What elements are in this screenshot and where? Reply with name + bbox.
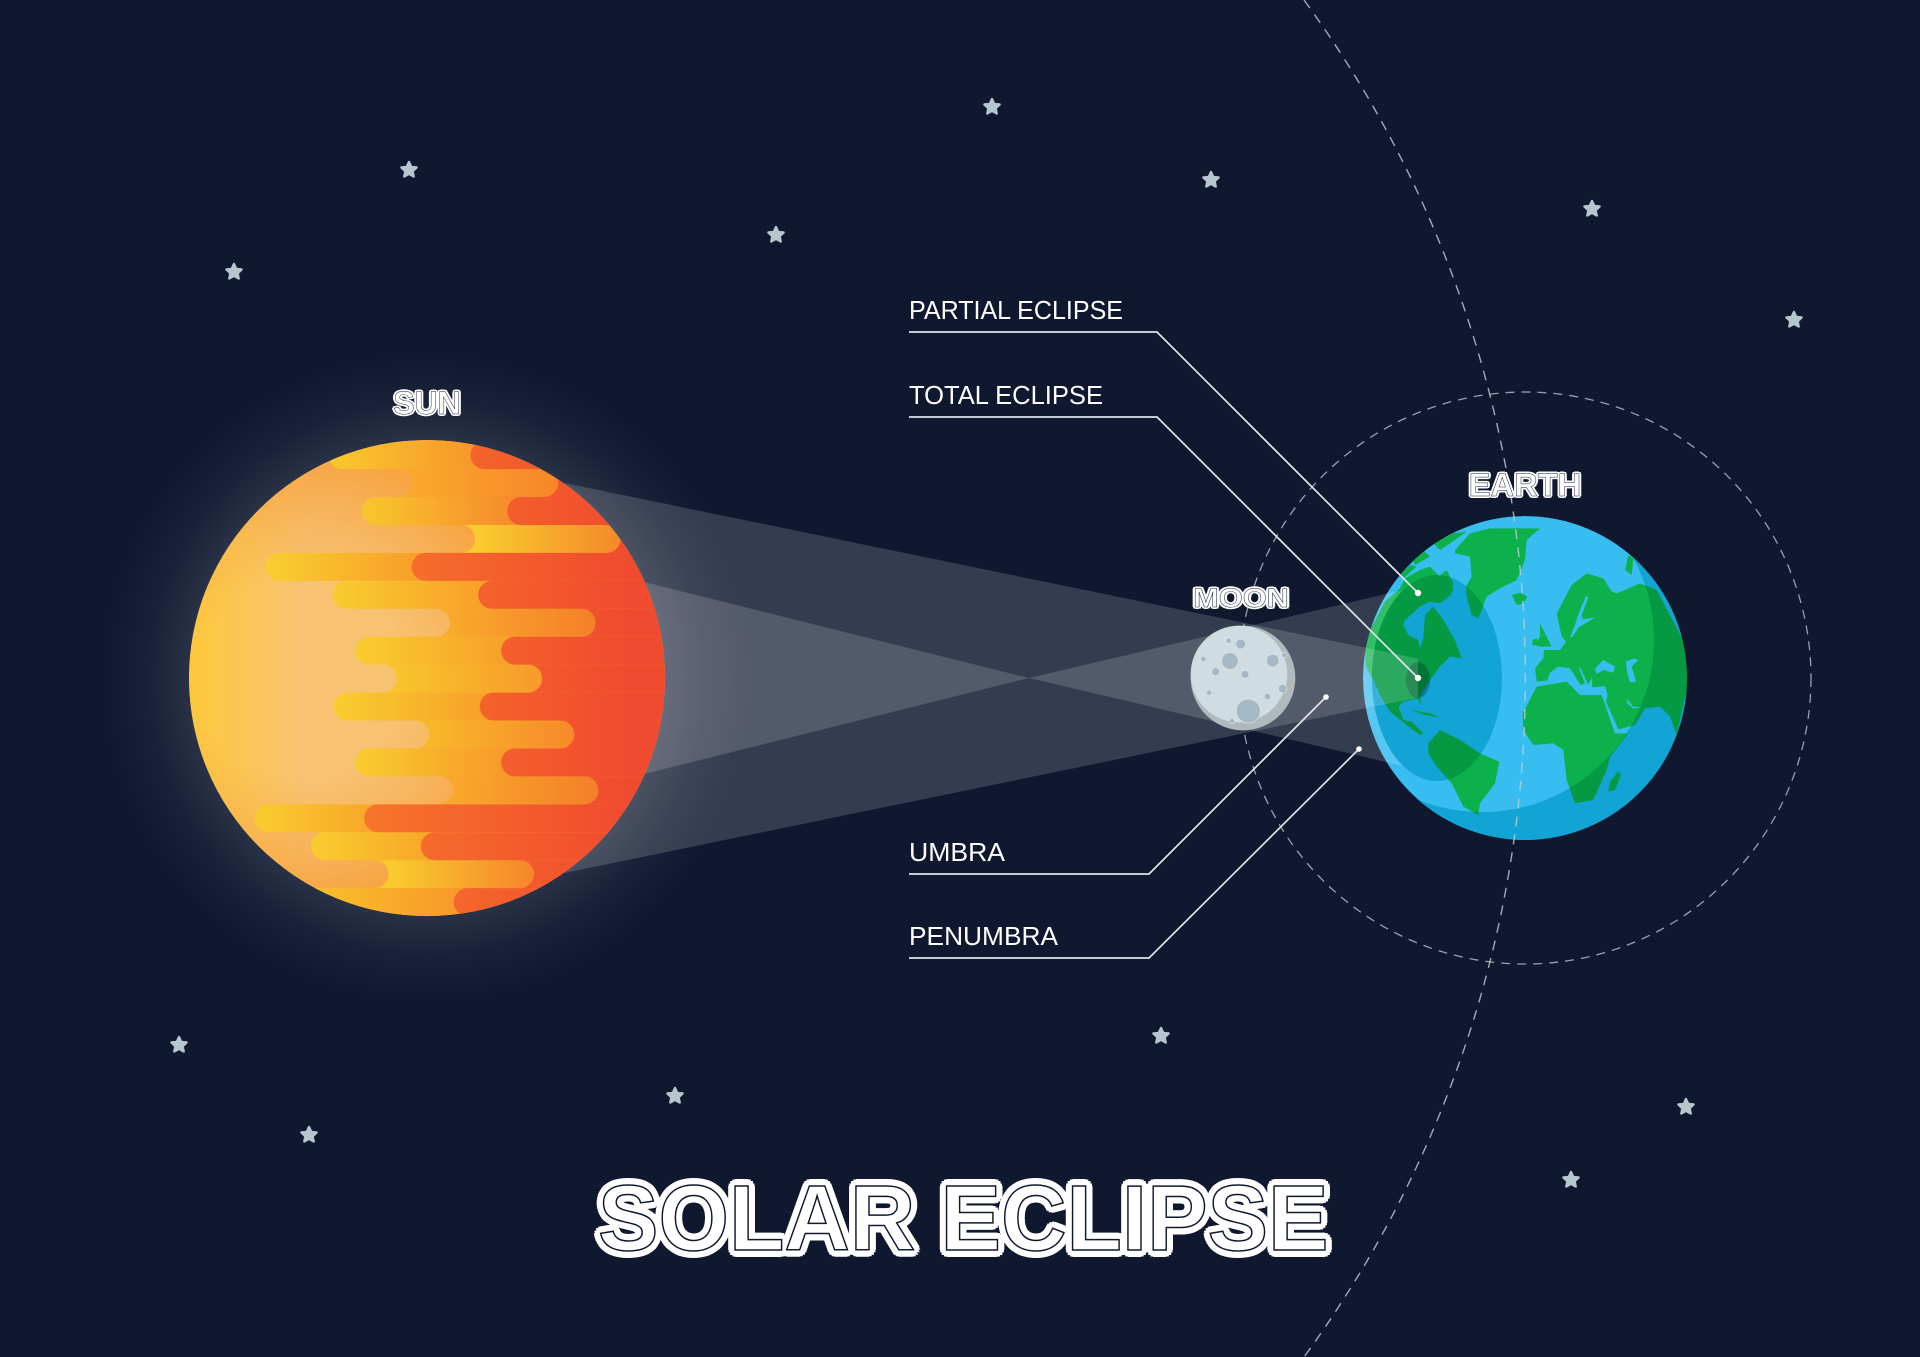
star [667,1088,683,1102]
moon craters [1201,638,1287,724]
umbra dot [1323,694,1329,700]
partial eclipse label: PARTIAL ECLIPSE [909,295,1123,325]
penumbra dot [1356,746,1362,752]
sun pale base disc [189,440,665,916]
umbra leader line [909,697,1326,874]
star [226,264,242,278]
total eclipse label: TOTAL ECLIPSE [909,380,1103,410]
sun [188,440,665,916]
star [768,227,784,242]
star [401,162,417,176]
sun heading: SUN [393,385,461,421]
total eclipse dot [1415,675,1421,681]
sun yellow-orange bands [254,441,665,916]
star [1203,172,1219,186]
inner beam from sun to crossing point [620,576,1029,780]
sun glow halo [102,353,752,1003]
star [1678,1099,1694,1114]
umbra label: UMBRA [909,837,1006,867]
callout: total eclipse [909,380,1421,681]
star [1563,1172,1579,1186]
sun red-orange bands [364,444,665,914]
star [984,99,1000,114]
dashed circle: moon orbit around earth [1239,392,1811,964]
diverging beam from crossing point to earth [1029,590,1403,766]
star [301,1127,317,1142]
star [171,1037,187,1052]
earth umbra shadow spot [1406,662,1430,698]
moon [1191,626,1295,730]
callout: partial eclipse [909,295,1421,596]
dashed arc: earth orbit around sun [1304,0,1525,1357]
earth globe [1363,516,1687,840]
outer converging beam [540,478,1418,878]
callout: penumbra [909,746,1362,958]
callout: umbra [909,694,1329,874]
earth continents [1365,528,1688,815]
partial eclipse leader line [909,332,1418,593]
earth night-side crescent [1418,556,1687,840]
star [1786,312,1802,326]
background star field [171,99,1802,1186]
earth inland seas [1570,596,1642,708]
penumbra label: PENUMBRA [909,921,1059,951]
sun base shading [189,440,665,916]
earth ocean disc [1363,516,1687,840]
total eclipse leader line [909,417,1418,678]
title: SOLAR ECLIPSE [598,1166,1329,1270]
star [1584,201,1600,216]
light beams [540,478,1418,878]
moon lit disc [1191,626,1287,722]
partial eclipse dot [1415,590,1421,596]
earth penumbra shadow ellipse [1372,575,1502,781]
moon heading: MOON [1193,583,1289,613]
earth heading: EARTH [1469,467,1581,503]
penumbra leader line [909,749,1359,958]
star [1153,1028,1169,1042]
moon shaded disc [1191,626,1295,730]
